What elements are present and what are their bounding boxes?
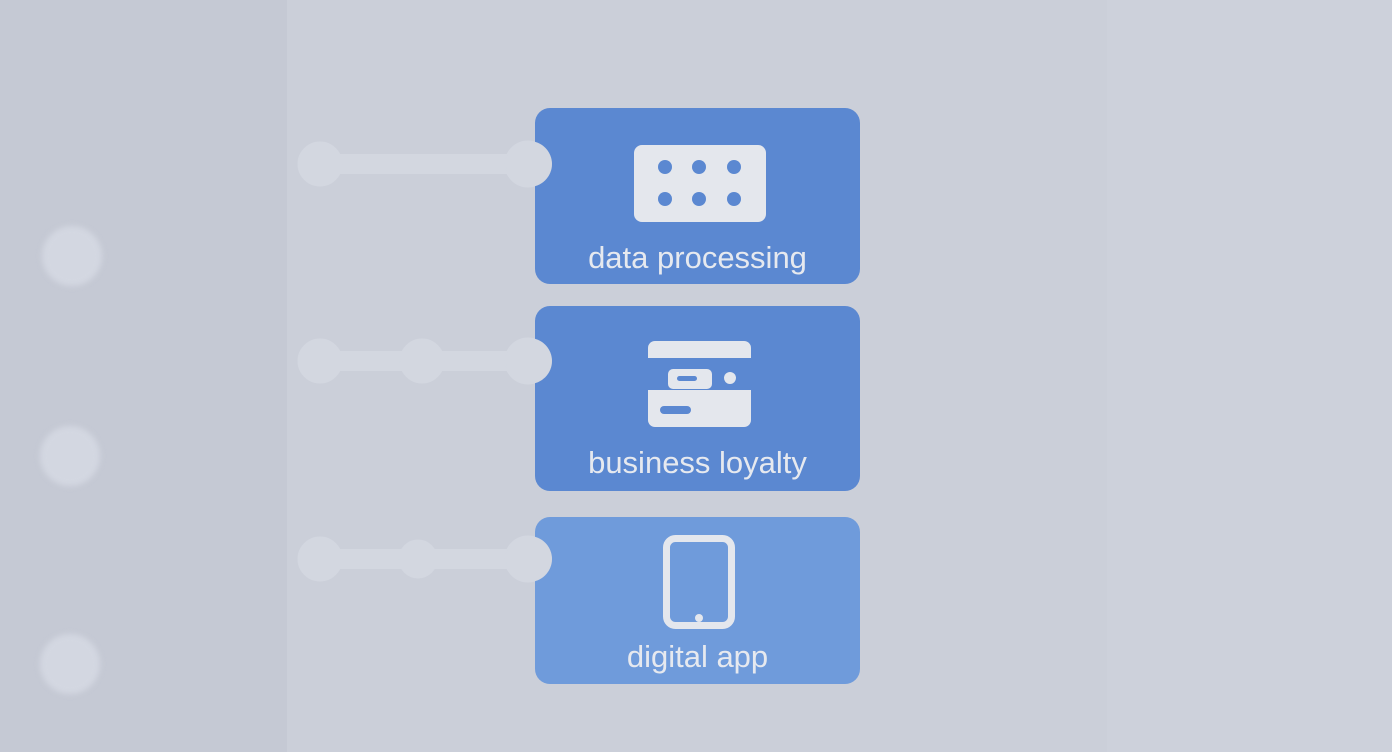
label: data processing <box>588 240 807 275</box>
label: business loyalty <box>588 445 807 480</box>
connector 3 <box>298 536 551 582</box>
card: digital app <box>535 517 860 684</box>
connector 2 <box>298 338 551 384</box>
label: digital app <box>627 639 768 674</box>
connector 1 <box>298 141 551 187</box>
icon: grid dots <box>634 145 766 222</box>
icon: card/panel <box>648 341 751 427</box>
decorative blurred dots <box>40 226 102 694</box>
card: data processing <box>535 108 860 284</box>
notch 1 <box>506 141 552 187</box>
notch 3 <box>506 536 552 582</box>
icon: phone <box>663 535 735 629</box>
card: business loyalty <box>535 306 860 491</box>
notch 2 <box>506 338 552 384</box>
